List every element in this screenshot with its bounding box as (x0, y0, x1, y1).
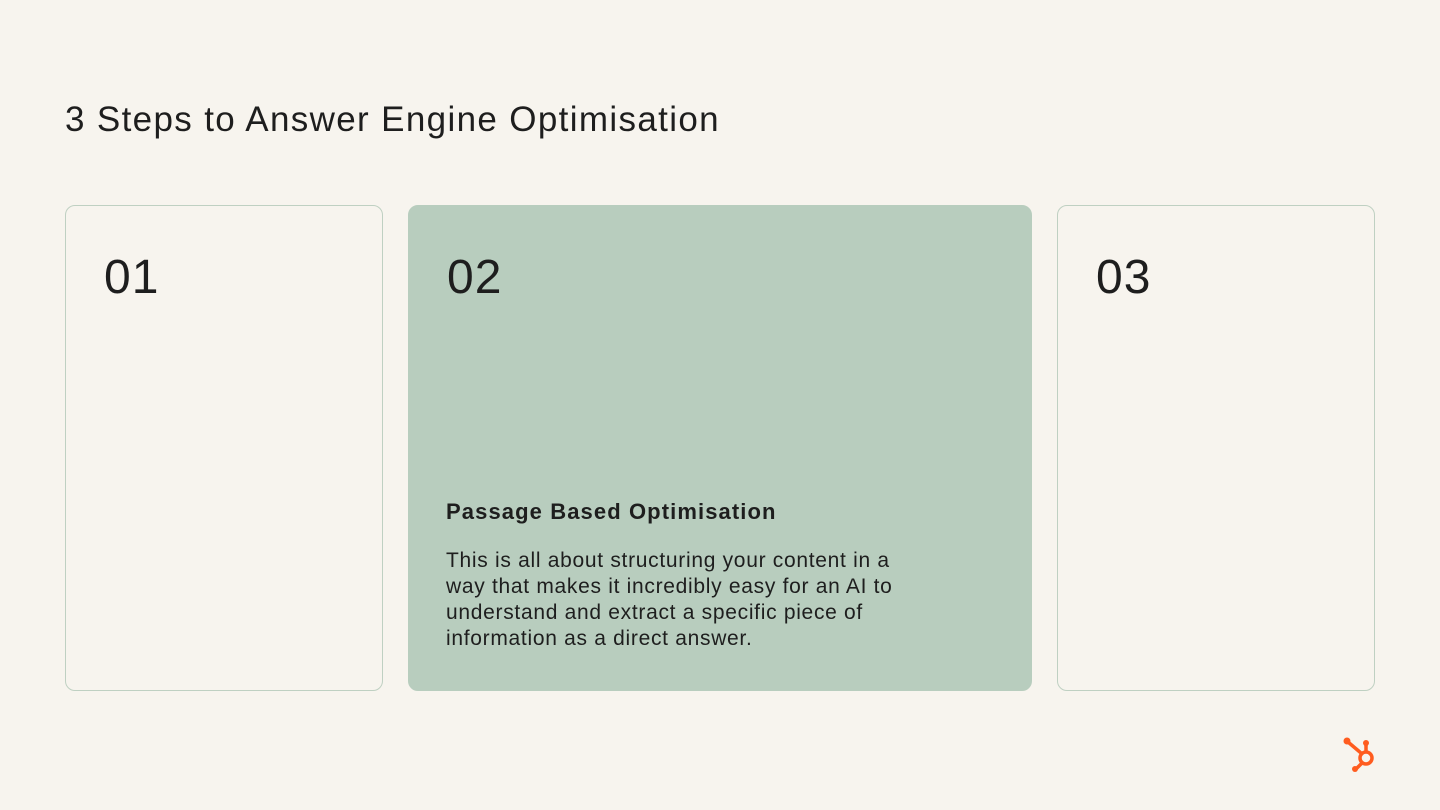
panel: step 01 (65, 205, 383, 691)
heading: Passage Based Optimisation: Passage Based Optimisation (446, 499, 777, 524)
number 02: 02 (447, 251, 502, 304)
icon: hubspot logo (1344, 738, 1374, 772)
panel: step 03 (1057, 205, 1375, 691)
number 01: 01 (104, 251, 159, 304)
number 03: 03 (1096, 251, 1151, 304)
title: 3 Steps to Answer Engine Optimisation (65, 100, 720, 139)
body text: This is all about structuring your content in a way that makes it incredibly easy for an AI to understand and extract a specific piece of information as a direct answer. (446, 549, 893, 650)
panel: step 02 (408, 205, 1032, 691)
